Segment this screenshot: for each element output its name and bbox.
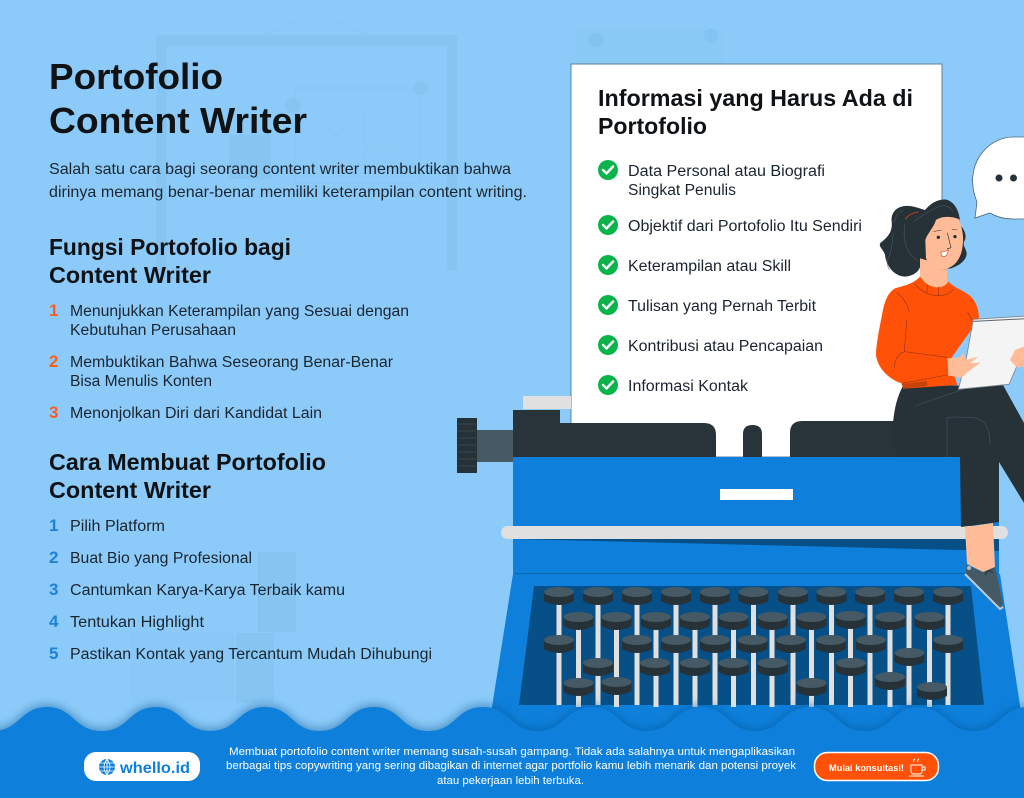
checklist: Keterampilan atau Skill: [628, 258, 791, 275]
heading: fungsi portofolio: [49, 234, 291, 288]
title: Content Writer: [49, 100, 307, 141]
list: cara membuat: 4: [49, 612, 59, 631]
list: fungsi portofolio: Membuktikan Bahwa Seseorang Benar-Benar: [70, 354, 393, 371]
typewriter: [457, 396, 1024, 745]
woman: hand: [947, 353, 981, 378]
list: cara membuat: 5: [49, 644, 58, 663]
footer wave shadow: [0, 705, 1024, 796]
typewriter label plate: [720, 489, 793, 500]
list: fungsi portofolio: Menonjolkan Diri dari Kandidat Lain: [70, 405, 322, 422]
typewriter lower body: [486, 574, 1024, 745]
intro paragraph: dirinya memang benar-benar memiliki keterampilan content writing.: [49, 184, 527, 201]
woman: calf: [965, 523, 995, 572]
list: cara membuat: Buat Bio yang Profesional: [70, 550, 252, 567]
list: cara membuat: Cantumkan Karya-Karya Terbaik kamu: [70, 582, 345, 599]
title: Portofolio: [49, 56, 223, 97]
list: cara membuat: 1: [49, 516, 58, 535]
paper heading: Informasi yang Harus Ada di: [598, 85, 913, 111]
checklist: Tulisan yang Pernah Terbit: [628, 298, 817, 315]
footer text: atau pekerjaan lebih terbuka.: [437, 775, 584, 787]
paper heading: [598, 85, 913, 139]
intro paragraph: Salah satu cara bagi seorang content writer membuktikan bahwa: [49, 161, 511, 178]
list: cara membuat: Pilih Platform: [70, 518, 165, 535]
list: fungsi portofolio: 3: [49, 403, 58, 422]
list: cara membuat: [49, 516, 432, 663]
call to action button: [814, 752, 938, 780]
list: fungsi portofolio: [49, 301, 409, 422]
list: fungsi portofolio: Kebutuhan Perusahaan: [70, 322, 236, 339]
icon: globe: [99, 759, 115, 775]
woman: [876, 199, 1024, 609]
typewriter upper body: [513, 457, 999, 580]
logo button: whello.id: [119, 760, 190, 777]
typewriter roller bar: [501, 526, 1008, 539]
list: cara membuat: 2: [49, 548, 58, 567]
call to action button: Mulai konsultasi!: [829, 763, 904, 774]
key stems: [556, 600, 950, 707]
checklist: Data Personal atau Biografi: [628, 163, 825, 180]
icon: coffee cup: [909, 759, 925, 776]
list: fungsi portofolio: Menunjukkan Keterampilan yang Sesuai dengan: [70, 303, 409, 320]
speech bubble: [973, 137, 1024, 219]
checklist: Informasi Kontak: [628, 378, 748, 395]
typewriter shadow band: [513, 539, 999, 551]
paper heading: Portofolio: [598, 113, 707, 139]
heading: cara membuat: Content Writer: [49, 477, 211, 503]
keyboard panel: [519, 586, 984, 705]
footer wave: [0, 707, 1024, 798]
woman: head: [880, 199, 967, 290]
heading: fungsi portofolio: Fungsi Portofolio bagi: [49, 234, 291, 260]
intro paragraph: [49, 161, 527, 201]
heading: cara membuat: Cara Membuat Portofolio: [49, 449, 326, 475]
heading: cara membuat: [49, 449, 326, 503]
title: [49, 56, 307, 141]
typewriter knob: [457, 418, 514, 473]
list: fungsi portofolio: 1: [49, 301, 58, 320]
panel: paper: [571, 64, 942, 457]
woman: shoe: [965, 565, 1003, 609]
list: fungsi portofolio: 2: [49, 352, 58, 371]
watermark: framed picture: [156, 12, 457, 270]
logo button: [84, 752, 200, 781]
heading: fungsi portofolio: Content Writer: [49, 262, 211, 288]
woman: notebook: [958, 316, 1024, 389]
typewriter carriage: [513, 396, 965, 457]
footer text: [226, 746, 797, 787]
checklist: Singkat Penulis: [628, 182, 736, 199]
footer text: berbagai tips copywriting yang sering dibagikan di internet agar portfolio kamu lebih menarik dan potensi proyek: [226, 760, 797, 772]
footer text: Membuat portofolio content writer memang susah-susah gampang. Tidak ada salahnya untuk mengaplikasikan: [229, 746, 795, 758]
list: cara membuat: 3: [49, 580, 58, 599]
watermark: bottom left shapes: [130, 552, 296, 703]
woman: legs: [893, 385, 1024, 527]
woman: sweater: [876, 277, 979, 389]
list: cara membuat: Tentukan Highlight: [70, 614, 205, 631]
keys: [544, 587, 963, 700]
checklist: Objektif dari Portofolio Itu Sendiri: [628, 218, 862, 235]
watermark: notes grid: [576, 28, 724, 64]
list: fungsi portofolio: Bisa Menulis Konten: [70, 373, 212, 390]
list: cara membuat: Pastikan Kontak yang Tercantum Mudah Dihubungi: [70, 646, 432, 663]
checklist: Kontribusi atau Pencapaian: [628, 338, 823, 355]
checklist: [598, 160, 862, 395]
